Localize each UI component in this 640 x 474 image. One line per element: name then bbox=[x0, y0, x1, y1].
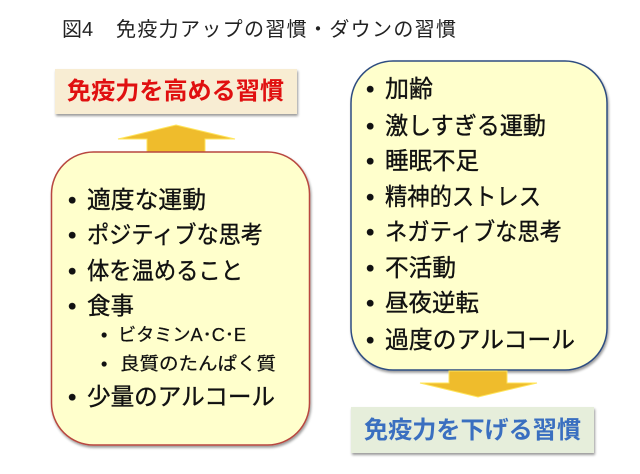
list: raising habits: • bbox=[68, 258, 76, 285]
list: raising habits: ポジティブな思考 bbox=[87, 222, 263, 249]
arrow: up bbox=[118, 125, 235, 153]
arrow: down bbox=[420, 371, 537, 397]
list: lowering habits: • bbox=[366, 219, 374, 246]
list: lowering habits: 精神的ストレス bbox=[385, 184, 541, 211]
list: raising habits: • bbox=[68, 293, 76, 320]
list: raising habits: 食事 bbox=[87, 293, 134, 320]
list: raising habits: 少量のアルコール bbox=[87, 384, 275, 411]
list: lowering habits: 加齢 bbox=[385, 76, 433, 103]
list: lowering habits: ネガティブな思考 bbox=[385, 219, 562, 246]
list: lowering habits: • bbox=[366, 148, 374, 175]
list: lowering habits: • bbox=[366, 184, 374, 211]
list: lowering habits: • bbox=[366, 255, 374, 282]
list: lowering habits bbox=[366, 76, 575, 354]
list: raising habits: • bbox=[101, 325, 107, 345]
heading: habits that raise immunity bbox=[55, 69, 297, 114]
heading: habits that raise immunity: 免疫力を高める習慣 bbox=[67, 78, 284, 105]
list: lowering habits: 不活動 bbox=[385, 255, 456, 282]
list: lowering habits: 激しすぎる運動 bbox=[385, 113, 546, 140]
heading: habits that lower immunity bbox=[351, 407, 594, 453]
list: raising habits: ビタミンA･C･E bbox=[118, 325, 246, 345]
list: lowering habits: 睡眠不足 bbox=[385, 148, 479, 175]
list: raising habits: • bbox=[68, 222, 76, 249]
title: 免疫力アップの習慣・ダウンの習慣 bbox=[116, 18, 456, 41]
list: lowering habits: • bbox=[366, 76, 374, 103]
list: raising habits: 適度な運動 bbox=[87, 187, 206, 214]
list: raising habits bbox=[68, 187, 276, 411]
list: raising habits: • bbox=[68, 187, 76, 214]
list: lowering habits: • bbox=[366, 290, 374, 317]
panel: habits that lower immunity bbox=[351, 61, 607, 370]
list: raising habits: 体を温めること bbox=[87, 258, 243, 285]
list: raising habits: 良質のたんぱく質 bbox=[120, 354, 276, 374]
title: 図4 bbox=[62, 19, 93, 41]
panel: habits that raise immunity bbox=[52, 152, 310, 445]
list: lowering habits: • bbox=[366, 327, 374, 354]
list: lowering habits: • bbox=[366, 113, 374, 140]
list: lowering habits: 昼夜逆転 bbox=[385, 290, 479, 317]
list: raising habits: • bbox=[101, 354, 107, 374]
list: lowering habits: 過度のアルコール bbox=[385, 327, 575, 354]
list: raising habits: • bbox=[68, 384, 76, 411]
heading: habits that lower immunity: 免疫力を下げる習慣 bbox=[364, 417, 581, 444]
